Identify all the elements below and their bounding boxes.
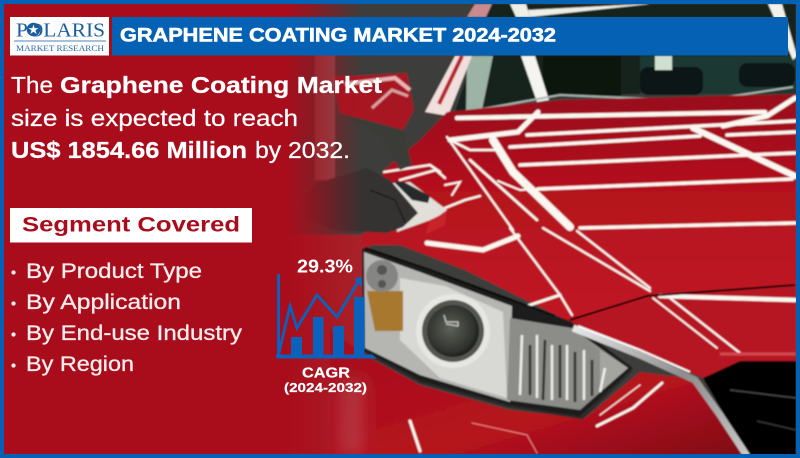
market size headline: Graphene Coating Market [60, 72, 382, 98]
lower-left highlight [335, 380, 363, 455]
CAGR label [284, 366, 367, 395]
market size headline: The [11, 72, 53, 98]
chrome strip [573, 326, 747, 456]
segment list [12, 260, 243, 376]
headlight [362, 248, 633, 418]
hood [360, 94, 796, 322]
title banner: GRAPHENE COATING MARKET 2024-2032 [120, 26, 556, 46]
pillar behind text [315, 55, 335, 180]
hand with cloth [300, 168, 447, 235]
panel seam [570, 285, 795, 320]
CAGR value: 29.3% [297, 256, 353, 276]
side mirror [333, 73, 414, 170]
A pillar [425, 56, 472, 116]
logo [10, 17, 109, 56]
logo: MARKET RESEARCH [16, 44, 104, 53]
market size headline: size is expected to reach [11, 105, 298, 131]
segment heading [10, 208, 252, 242]
market size headline: US$ 1854.66 Million [11, 137, 247, 163]
lower bumper [330, 330, 750, 458]
grille [703, 361, 796, 456]
fender [570, 285, 796, 378]
segment list: By Product Type [26, 260, 202, 283]
market size headline: by 2032. [255, 137, 350, 163]
segment list: By End-use Industry [26, 322, 243, 345]
red fade overlay [0, 0, 362, 458]
icon: growth chart [276, 274, 377, 358]
CAGR label: CAGR [302, 366, 351, 382]
segment list: By Application [26, 291, 181, 314]
hood reflections [384, 98, 795, 453]
segment list: By Region [26, 353, 134, 376]
market size headline [11, 72, 382, 163]
logo: POLARIS [16, 20, 105, 42]
segment heading: Segment Covered [22, 214, 240, 236]
windshield [455, 4, 797, 112]
CAGR label: (2024-2032) [284, 380, 367, 395]
title banner [112, 17, 788, 56]
